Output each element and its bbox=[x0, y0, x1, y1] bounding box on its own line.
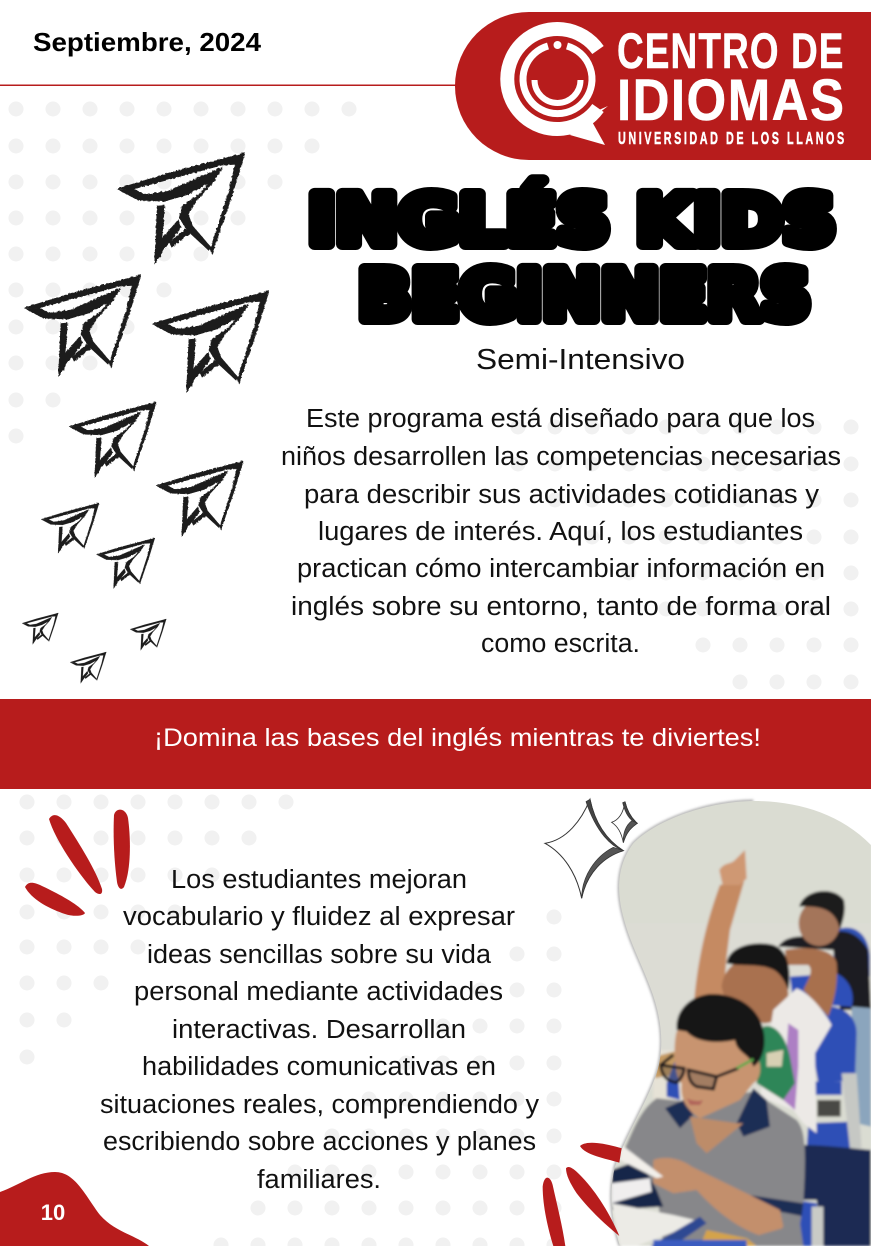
benefits text: vocabulario y fluidez al expresar bbox=[123, 903, 516, 931]
glasses bbox=[661, 1055, 738, 1089]
benefits text: interactivas. Desarrollan bbox=[172, 1016, 466, 1044]
middle boy bbox=[785, 948, 837, 1017]
logo panel: Centro de Idiomas bbox=[455, 12, 871, 160]
forearm and hand bbox=[653, 1158, 783, 1238]
chairs bbox=[790, 973, 853, 1007]
logo wordmark: UNIVERSIDAD DE LOS LLANOS bbox=[618, 129, 844, 149]
program description text: Este programa está diseñado para que los bbox=[306, 405, 815, 433]
red banner bbox=[0, 699, 871, 789]
program description text: para describir sus actividades cotidianas y bbox=[304, 481, 819, 509]
pants bbox=[797, 1145, 871, 1246]
front boy polo bbox=[623, 1092, 805, 1246]
subtitle: Semi-Intensivo bbox=[476, 344, 685, 376]
banner slogan: ¡Domina las bases del inglés mientras te diviertes! bbox=[154, 724, 761, 752]
title bbox=[308, 179, 836, 336]
benefits text: familiares. bbox=[257, 1166, 381, 1194]
date heading: Septiembre, 2024 bbox=[33, 27, 262, 57]
paper planes illustration bbox=[22, 153, 269, 683]
title: INGLÉS KIDS bbox=[308, 179, 836, 261]
title: BEGINNERS bbox=[358, 256, 811, 336]
benefits text: escribiendo sobre acciones y planes bbox=[103, 1128, 536, 1156]
page number badge bbox=[0, 1172, 149, 1246]
benefits text: personal mediante actividades bbox=[134, 978, 503, 1006]
red accent strokes bottom-right bbox=[543, 1143, 622, 1246]
program description text: inglés sobre su entorno, tanto de forma oral bbox=[291, 593, 831, 621]
benefits text: ideas sencillas sobre su vida bbox=[147, 941, 492, 969]
benefits text: Los estudiantes mejoran bbox=[171, 866, 467, 894]
program description text bbox=[281, 405, 841, 658]
header rule bbox=[0, 84, 460, 86]
benefits text: situaciones reales, comprendiendo y bbox=[100, 1091, 539, 1119]
benefits text bbox=[100, 866, 539, 1194]
dark backing and papers bbox=[612, 1160, 663, 1210]
icon: sparkle stars bbox=[545, 799, 637, 898]
program description text: lugares de interés. Aquí, los estudiantes bbox=[318, 518, 803, 546]
logo wordmark bbox=[617, 24, 844, 149]
back chair and boy bbox=[833, 928, 870, 977]
icon: speech bubble smiley bbox=[507, 29, 608, 145]
program description text: practican cómo intercambiar información en bbox=[297, 555, 825, 583]
face bbox=[675, 1028, 760, 1118]
red accent strokes top-left bbox=[25, 810, 130, 916]
logo wordmark: CENTRO DE bbox=[617, 24, 843, 79]
raised arm bbox=[694, 882, 744, 1003]
program description text: como escrita. bbox=[481, 630, 640, 658]
logo wordmark: IDIOMAS bbox=[617, 68, 844, 133]
program description text: niños desarrollen las competencias necesarias bbox=[281, 443, 841, 471]
benefits text: habilidades comunicativas en bbox=[142, 1053, 496, 1081]
page number: 10 bbox=[41, 1200, 65, 1225]
photo: students in classroom bbox=[607, 790, 871, 1246]
